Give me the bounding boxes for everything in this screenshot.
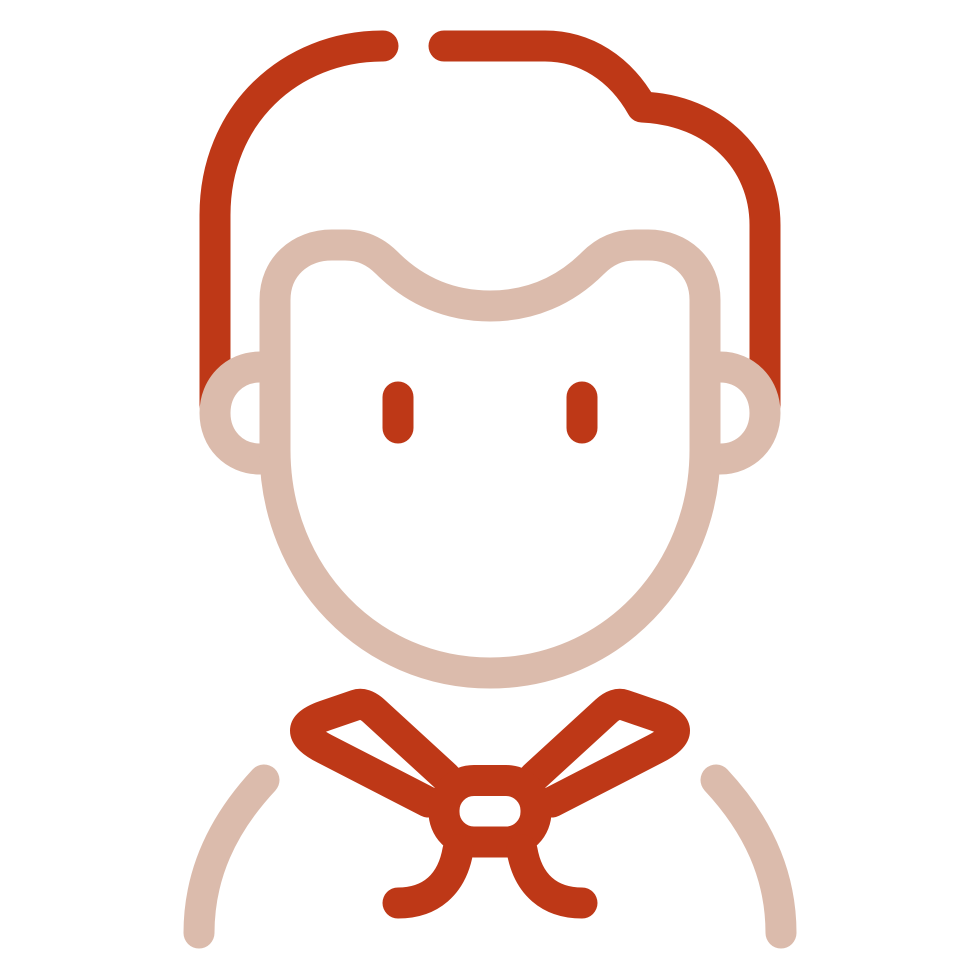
neckerchief	[306, 704, 674, 903]
eyes	[398, 397, 582, 428]
hair	[215, 46, 765, 405]
shoulders	[199, 780, 781, 933]
ears	[215, 367, 765, 459]
face outline	[275, 245, 705, 673]
